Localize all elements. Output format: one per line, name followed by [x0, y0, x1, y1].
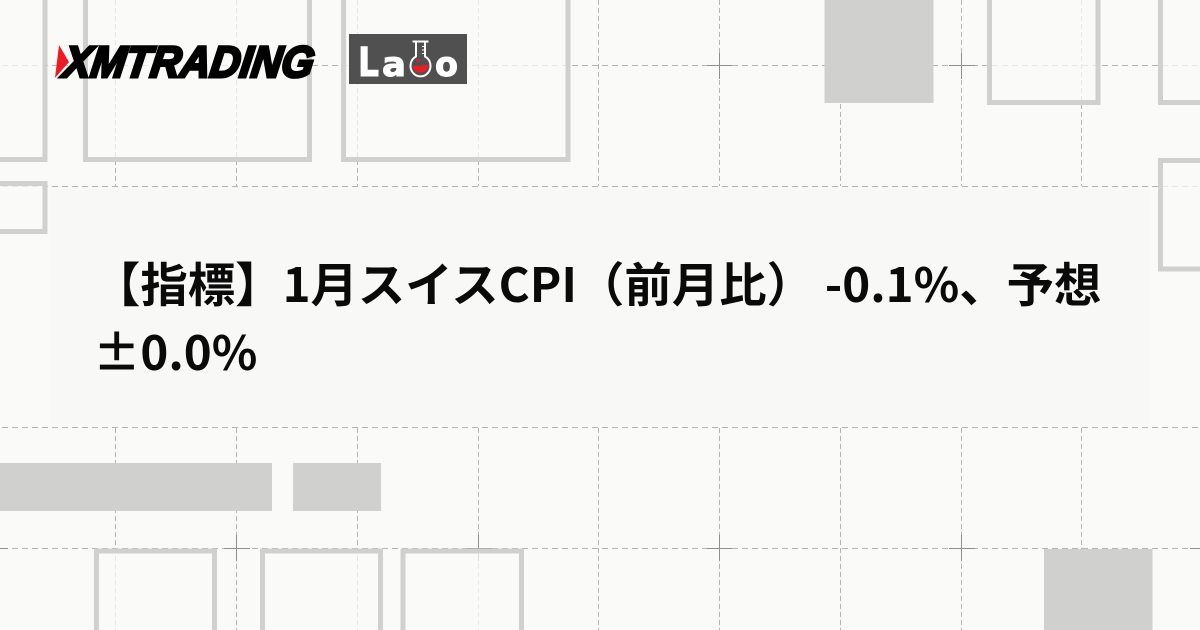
panel: title backdrop	[50, 187, 1150, 425]
title: 【指標】1月スイスCPI（前月比） -0.1%、予想	[93, 247, 1101, 316]
icon: flask	[411, 42, 431, 76]
logo: Lab: L	[358, 40, 379, 86]
logo: XMTRADING: XMTRADING	[58, 38, 317, 87]
logo: Lab	[349, 34, 467, 86]
logo: Lab: a	[382, 45, 406, 85]
title: ±0.0%	[93, 315, 257, 384]
logo: Lab: o	[435, 45, 458, 85]
title	[93, 247, 1101, 384]
